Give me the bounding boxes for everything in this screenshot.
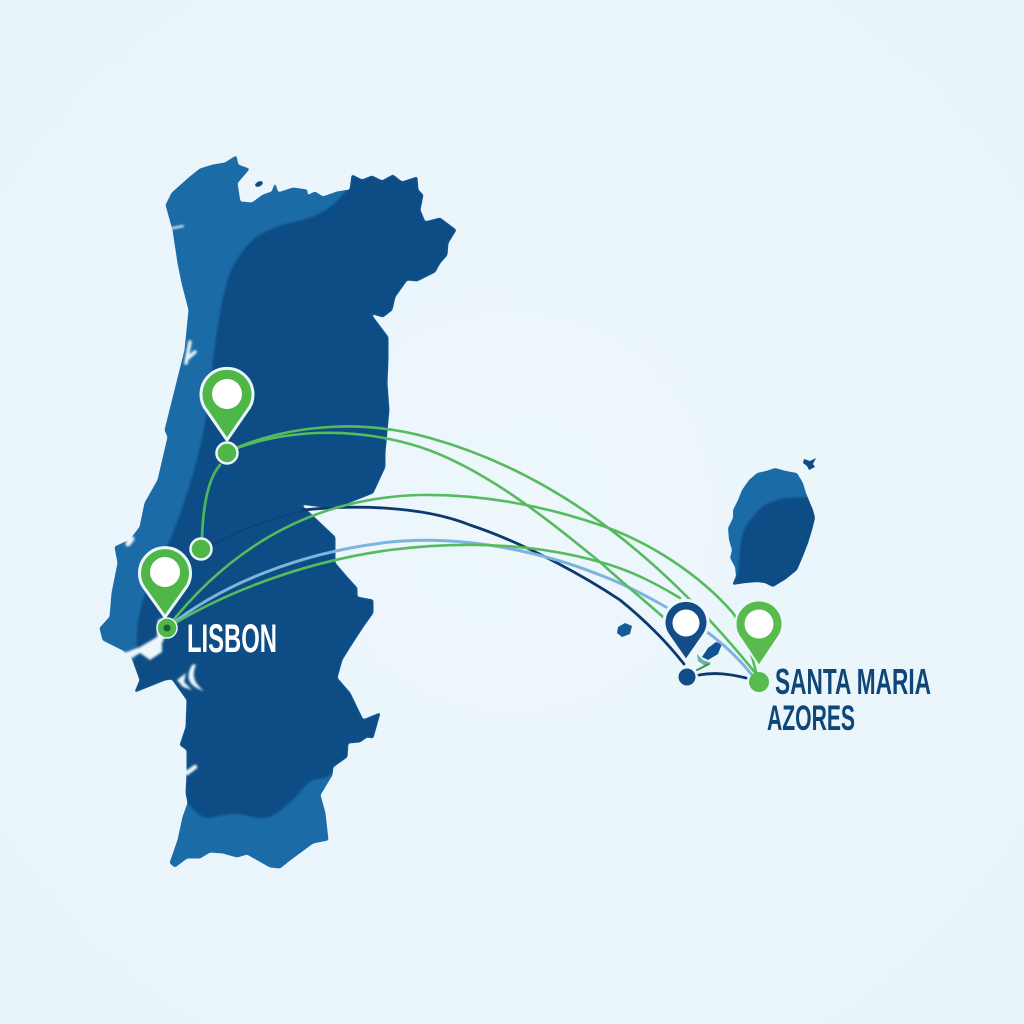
- icon: small islet near pins: [697, 642, 722, 666]
- icon: small islet northeast: [803, 458, 816, 470]
- label: Santa Maria: SANTA MARIA: [775, 661, 931, 702]
- mainland outline, coastal light blue: [100, 156, 456, 868]
- route arcs: [167, 427, 758, 680]
- marker: Lisbon location pin: [140, 548, 191, 617]
- island interior, dark blue: [732, 496, 815, 587]
- Tagus estuary cutout: [123, 617, 170, 660]
- map: Azores main island: [728, 468, 815, 587]
- route: lower green arc from Lisbon: [167, 545, 680, 628]
- marker: north dot: [216, 442, 238, 464]
- white wedge near the southern bay: [177, 673, 192, 690]
- route: upper green arc from north pin: [227, 427, 757, 675]
- island outline, light blue: [728, 468, 815, 587]
- route: upper green arc from Lisbon: [167, 495, 758, 680]
- marker: Lisbon dot: [157, 618, 177, 638]
- icon: small islet west: [617, 623, 632, 637]
- mainland interior, dark blue: [133, 175, 456, 818]
- marker: north location pin: [201, 368, 253, 440]
- route: Coimbra to Lisbon link: [202, 465, 220, 537]
- route: blue arc: [167, 540, 752, 675]
- marker: Santa Maria location pin: [736, 600, 782, 666]
- label: Azores: AZORES: [767, 699, 855, 738]
- marker: Santa Maria dot: [749, 672, 769, 692]
- marker: navy dot: [678, 668, 696, 686]
- marker: middle dot: [190, 538, 212, 560]
- route: short green dash: [697, 664, 709, 670]
- route: navy arc: [303, 507, 684, 664]
- marker: navy location pin: [664, 600, 708, 661]
- coastal inlets: [128, 226, 195, 773]
- map: mainland Portugal: [100, 150, 480, 868]
- route: navy link between island dots: [699, 674, 746, 678]
- route: faint navy start: [212, 511, 303, 545]
- small northern islet: [254, 180, 264, 188]
- label: Lisbon: LISBON: [187, 617, 277, 661]
- white crescent near the southern bay: [188, 664, 204, 691]
- route: lower green arc from north pin: [227, 433, 672, 625]
